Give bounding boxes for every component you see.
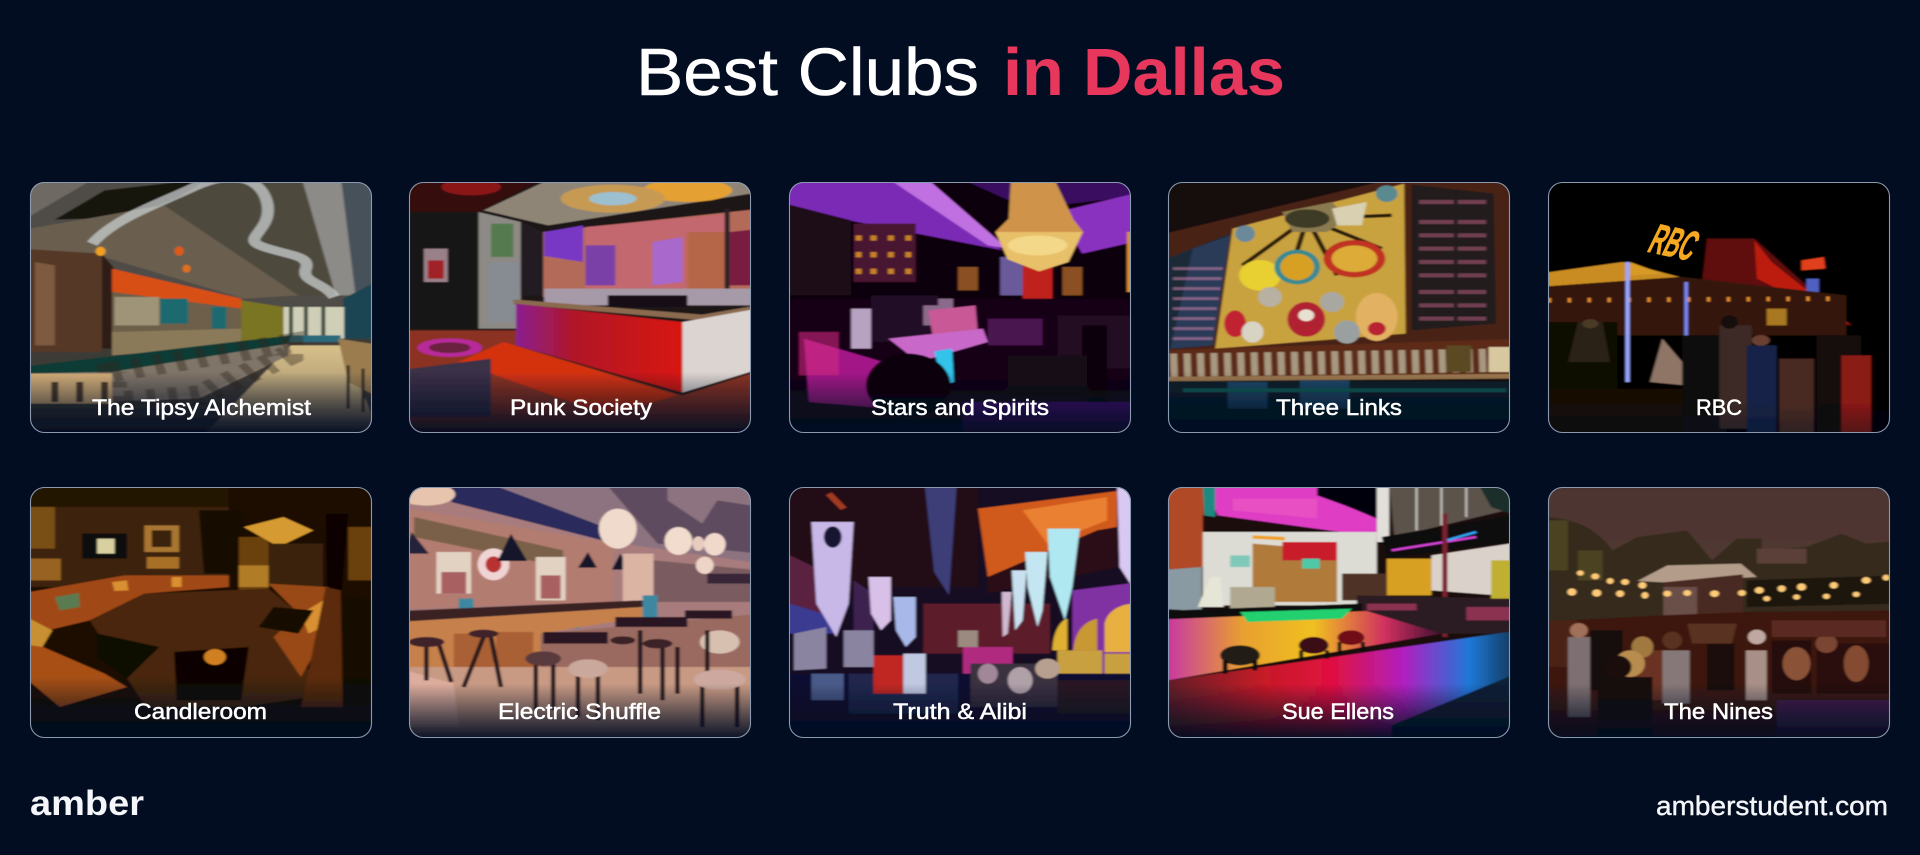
card: Three Links: Three Links — [1276, 395, 1402, 420]
title: in Dallas — [1003, 35, 1285, 110]
card: RBC: RBC — [1696, 395, 1742, 420]
card: The Tipsy Alchemist: The Tipsy Alchemist — [92, 395, 311, 420]
card: RBC — [1538, 175, 1900, 440]
title: Best Clubs — [636, 35, 979, 110]
logo: amber: amber — [30, 784, 144, 823]
card: The Tipsy Alchemist — [20, 175, 382, 440]
card: Candleroom: Candleroom — [134, 699, 267, 724]
card: The Nines — [1538, 480, 1900, 745]
card: Electric Shuffle — [408, 487, 752, 738]
card: Sue Ellens: Sue Ellens — [1282, 699, 1394, 724]
card: Sue Ellens — [1158, 480, 1520, 745]
card: Punk Society: Punk Society — [510, 395, 652, 420]
card: The Nines: The Nines — [1664, 699, 1773, 724]
card: RBC: RBC — [1642, 216, 1706, 270]
card: Truth & Alibi: Truth & Alibi — [893, 699, 1027, 724]
card: Candleroom — [20, 480, 382, 745]
website url: amberstudent.com — [1656, 791, 1888, 821]
title — [636, 35, 1285, 110]
card: Electric Shuffle: Electric Shuffle — [498, 699, 661, 724]
card: Three Links — [1158, 175, 1520, 440]
card: Truth & Alibi — [779, 480, 1141, 745]
card: Punk Society — [399, 175, 761, 440]
card: Stars and Spirits: Stars and Spirits — [871, 395, 1049, 420]
card: Stars and Spirits — [779, 175, 1141, 440]
